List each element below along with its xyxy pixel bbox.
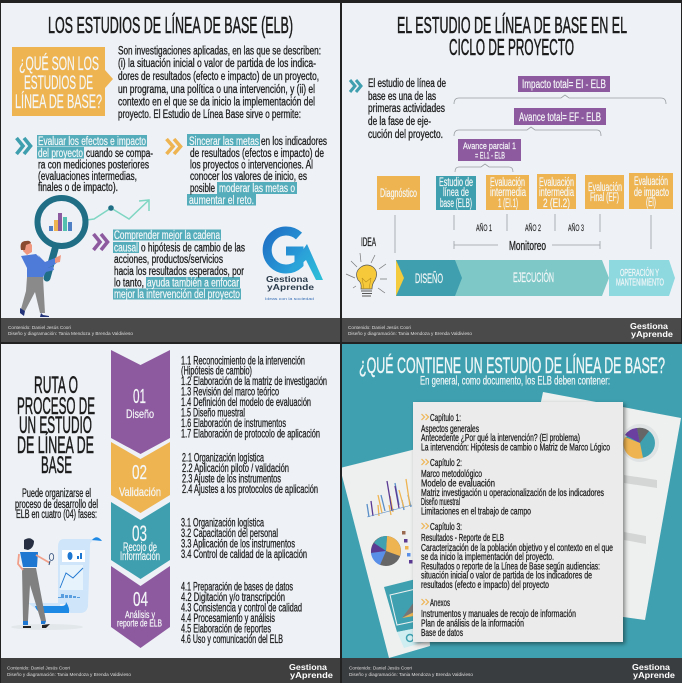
footer: credits: Contenido: Daniel Jesús Coori bbox=[8, 325, 71, 330]
title bbox=[397, 12, 627, 60]
text block: understand causal chain: causal bbox=[114, 242, 138, 254]
list: step 2 tasks: 2.4 Ajustes a los protocolos de aplicación bbox=[182, 482, 318, 496]
text block: evaluate effects: ra con mediciones posteriores bbox=[38, 160, 149, 172]
list: step 3 tasks: 3.3 Aplicación de los instrumentos bbox=[181, 536, 295, 550]
panel: baseline study in the project cycle bbox=[342, 3, 681, 342]
box: diagnosis: Diagnóstico bbox=[380, 188, 417, 200]
box: intermediate evaluation 2: intermedia bbox=[539, 187, 574, 199]
step 3: data collection bbox=[111, 502, 170, 579]
arrow: phases bbox=[396, 260, 675, 296]
text block: evaluate effects bbox=[37, 135, 153, 194]
label: partial progress: = EI.1 - ELB bbox=[475, 150, 505, 162]
section: annexes: Plan de análisis de la información bbox=[421, 618, 524, 630]
box: intermediate evaluation 2: Evaluación bbox=[539, 177, 574, 189]
panel: route of a baseline study bbox=[1, 344, 340, 683]
footer: credits: Contenido: Daniel Jesús Coori bbox=[7, 666, 70, 670]
text block: evaluate effects: del proyecto bbox=[38, 148, 83, 160]
timeline: years and monitoring: AÑO 3 bbox=[568, 223, 584, 234]
section: annexes: Base de datos bbox=[421, 627, 463, 639]
list: step 2 tasks: 2.3 Ajuste de los instrumentos bbox=[182, 472, 281, 486]
footer: credits bbox=[342, 318, 681, 342]
step 1: design: 01 bbox=[133, 386, 146, 408]
icon: purple chevrons bbox=[94, 234, 108, 250]
text block: definition: dores de resultados (efecto e impacto) de un proyecto, bbox=[118, 71, 319, 83]
text block: evaluate effects: (evaluaciones intermedias, bbox=[38, 171, 137, 183]
section: chapter 2: Marco metodológico bbox=[421, 468, 482, 480]
label: total impact bbox=[518, 76, 610, 92]
list: step 4 tasks bbox=[181, 580, 302, 646]
footer: credits: Diseño y diagramación: Tania Mendoza y Brenda Valdivieso bbox=[8, 331, 133, 336]
list: step 3 tasks: 3.1 Organización logística bbox=[181, 516, 264, 530]
text block: set realistic targets: conocer los valores de inicio, es bbox=[190, 171, 307, 183]
label: partial progress: Avance parcial 1 bbox=[463, 141, 516, 152]
list: step 3 tasks bbox=[181, 516, 307, 561]
list: step 1 tasks bbox=[181, 354, 327, 440]
section: chapter 1: Capítulo 1: bbox=[430, 412, 461, 424]
text block: intro: base es una de las bbox=[368, 91, 436, 103]
text block: evaluate effects: cuando se compa- bbox=[86, 148, 153, 160]
text block: set realistic targets: posible bbox=[190, 183, 215, 195]
footer: credits: yAprende bbox=[631, 329, 673, 339]
footer: credits: Gestiona bbox=[632, 662, 670, 672]
step 4: analysis and report: Análisis y bbox=[125, 610, 155, 621]
step 1: design bbox=[111, 350, 170, 454]
list: step 2 tasks: 2.2 Aplicación piloto / validación bbox=[182, 461, 289, 475]
list: step 4 tasks: 4.3 Consistencia y control de calidad bbox=[181, 600, 302, 614]
text block: understand causal chain: ayuda también a enfocar bbox=[147, 278, 239, 290]
section: chapter 2: Capítulo 2: bbox=[430, 457, 462, 469]
list: step 1 tasks: 1.2 Elaboración de la matriz de investigación bbox=[181, 374, 327, 388]
list: step 4 tasks: 4.5 Elaboración de reportes bbox=[181, 622, 271, 636]
footer: credits: Gestiona bbox=[630, 321, 668, 331]
box: final evaluation bbox=[585, 175, 624, 209]
text block: set realistic targets: moderar las metas o bbox=[219, 183, 295, 195]
timeline: years and monitoring: Monitoreo bbox=[509, 239, 546, 253]
arrow: phases: EJECUCIÓN bbox=[513, 269, 554, 285]
callout: question box bbox=[12, 47, 113, 116]
logo: Gestiona y Aprende: yAprende bbox=[267, 282, 314, 292]
section: chapter 3: Capítulo 3: bbox=[430, 521, 462, 533]
text block: evaluate effects: Evaluar los efectos e impacto bbox=[38, 136, 146, 148]
title: DE LÍNEA DE bbox=[17, 432, 94, 459]
label: total progress: Avance total= EF - ELB bbox=[519, 112, 601, 124]
step 2: validation: Validación bbox=[119, 485, 161, 499]
text block: intro: cución del proyecto. bbox=[368, 129, 443, 141]
section: chapter 3: Resultados - Reporte de ELB bbox=[421, 532, 504, 544]
section: annexes: Anexos bbox=[430, 597, 450, 609]
logo: Gestiona y Aprende: Ideas con la sociedad bbox=[265, 297, 314, 301]
text block: definition: contexto en el que se da inicio la implementación del bbox=[118, 96, 315, 108]
box: baseline study: Estudio de bbox=[439, 177, 473, 189]
step 2: validation: 02 bbox=[132, 462, 147, 484]
text block: understand causal chain: mejor la intervención del proyecto bbox=[114, 289, 240, 301]
step 3: data collection: 03 bbox=[132, 521, 147, 546]
footer: credits bbox=[1, 318, 340, 342]
text block: definition: Son investigaciones aplicadas, en las que se describen: bbox=[118, 46, 321, 58]
text block: set realistic targets: los proyectos o intervenciones. Al bbox=[190, 160, 313, 172]
step 4: analysis and report: 04 bbox=[133, 589, 148, 611]
timeline: years and monitoring bbox=[454, 223, 600, 253]
footer: credits: yAprende bbox=[290, 670, 333, 680]
section: annexes: Instrumentos y manuales de recojo de información bbox=[421, 608, 576, 620]
logo: Gestiona y Aprende bbox=[265, 231, 323, 301]
box: final evaluation: Final (EF) bbox=[590, 192, 619, 204]
box: baseline study: línea de bbox=[443, 187, 469, 199]
box: baseline study bbox=[436, 176, 476, 210]
callout: question box: LÍNEA DE BASE? bbox=[15, 92, 102, 113]
text block: understand causal chain: o hipótesis de cambio de las bbox=[141, 242, 245, 254]
text block: intro: ELB en cuatro (04) fases: bbox=[16, 509, 97, 521]
step 1: design: Diseño bbox=[126, 407, 154, 421]
footer: credits bbox=[342, 658, 682, 683]
box: intermediate evaluation 2 bbox=[537, 174, 576, 210]
section: chapter 2: Modelo de evaluación bbox=[421, 478, 495, 490]
section: chapter 2: Diseño muestral bbox=[421, 496, 460, 508]
box: intermediate evaluation 1: 1 (EI.1) bbox=[498, 198, 518, 210]
label: total impact: Impacto total= EI - ELB bbox=[522, 79, 606, 91]
callout: question box: ¿QUÉ SON LOS bbox=[19, 54, 99, 75]
list: step 1 tasks: 1.6 Elaboración de instrumentos bbox=[181, 416, 286, 430]
text block: intro bbox=[15, 488, 98, 521]
list: step 1 tasks: 1.4 Definición del modelo de evaluación bbox=[181, 395, 311, 409]
text block: definition: un programa, una política o una intervención, y (ii) el bbox=[118, 84, 315, 96]
section: chapter 3: resultados (efecto e impacto) del proyecto bbox=[421, 579, 549, 591]
footer: credits: Diseño y diagramación: Tania Mendoza y Brenda Valdivieso bbox=[348, 331, 472, 336]
title: LOS ESTUDIOS DE LÍNEA DE BASE (ELB) bbox=[48, 12, 293, 38]
text block: definition: proyecto. El Estudio de Línea Base sirve o permite: bbox=[118, 109, 301, 121]
list: step 4 tasks: 4.2 Digitación y/o transcripción bbox=[181, 590, 285, 604]
list: step 2 tasks bbox=[182, 450, 318, 496]
box: intermediate evaluation 1 bbox=[486, 175, 529, 210]
text block: understand causal chain: Comprender mejor la cadena bbox=[114, 230, 220, 242]
list: step 4 tasks: 4.1 Preparación de bases de datos bbox=[181, 580, 293, 594]
main document sheet bbox=[413, 402, 623, 642]
text block: understand causal chain: lo tanto, bbox=[114, 278, 144, 290]
title bbox=[17, 372, 95, 479]
text block: evaluate effects: finales o de impacto). bbox=[38, 182, 118, 194]
text block: set realistic targets: Sincerar las metas bbox=[189, 136, 259, 148]
list: step 4 tasks: 4.6 Uso y comunicación del ELB bbox=[181, 632, 283, 646]
text block: set realistic targets: aumentar el reto. bbox=[189, 195, 254, 207]
panel: what are baseline studies bbox=[1, 3, 340, 342]
box: diagnosis bbox=[377, 176, 420, 210]
list: step 1 tasks: (Hipótesis de cambio) bbox=[181, 364, 252, 378]
box: final evaluation: Evaluación bbox=[588, 182, 622, 194]
text block: set realistic targets bbox=[187, 134, 327, 207]
list: step 3 tasks: 3.4 Control de calidad de la aplicación bbox=[181, 547, 307, 561]
arrow: phases: DISEÑO bbox=[415, 270, 443, 286]
icon: person with magnifier and chart bbox=[20, 198, 149, 317]
box: impact evaluation: (EI) bbox=[646, 197, 656, 209]
box: intermediate evaluation 1: Evaluación bbox=[490, 177, 525, 189]
icon: teal chevrons bbox=[16, 138, 30, 154]
timeline: years and monitoring: AÑO 1 bbox=[476, 223, 492, 234]
icon: gold chevrons bbox=[166, 139, 180, 154]
text block: understand causal chain bbox=[113, 230, 245, 301]
text block: definition: (i) la situación inicial o valor de partida de los indica- bbox=[118, 58, 316, 70]
section: chapter 1: Antecedente ¿Por qué la intervención? (El problema) bbox=[421, 432, 580, 444]
timeline: years and monitoring: AÑO 2 bbox=[525, 223, 541, 234]
illustration: left document sheet bbox=[340, 448, 432, 658]
logo: Gestiona y Aprende: Gestiona bbox=[266, 274, 308, 284]
list: step 1 tasks: 1.5 Diseño muestral bbox=[181, 406, 245, 420]
text block: intro: Puede organizarse el bbox=[22, 488, 91, 500]
box: intermediate evaluation 2: 2 (EI.2) bbox=[543, 198, 570, 210]
panel: route of a baseline study: PROCESO DE bbox=[17, 393, 95, 420]
list: step 1 tasks: 1.7 Elaboración de protocolo de aplicación bbox=[181, 426, 320, 440]
text block: intro: El estudio de línea de bbox=[368, 78, 446, 90]
section: chapter 3: situación inicial o valor de partida de los indicadores de bbox=[421, 570, 592, 582]
footer: credits: Diseño y diagramación: Tania Mendoza y Brenda Valdivieso bbox=[7, 672, 131, 677]
footer: credits: Gestiona bbox=[289, 662, 327, 672]
footer: credits bbox=[1, 658, 340, 683]
section: annexes bbox=[421, 597, 576, 639]
text block: intro: proceso de desarrollo del bbox=[15, 499, 98, 511]
text block: intro: primeras actividades bbox=[368, 103, 445, 115]
text block: set realistic targets: en los indicadores bbox=[261, 136, 327, 148]
footer: credits: Contenido: Daniel Jesús Coori bbox=[349, 666, 412, 670]
text block: set realistic targets: de resultados (efectos e impacto) de bbox=[190, 148, 324, 160]
section: chapter 3 bbox=[421, 521, 613, 591]
box: intermediate evaluation 1: intermedia bbox=[490, 187, 526, 199]
list: step 1 tasks: 1.1 Reconocimiento de la intervención bbox=[181, 354, 305, 368]
footer: credits: yAprende bbox=[633, 670, 675, 680]
title: UN ESTUDIO bbox=[19, 412, 92, 439]
label: total progress bbox=[514, 108, 606, 125]
panel: what a baseline study contains bbox=[340, 344, 682, 683]
box: baseline study: base (ELB) bbox=[440, 198, 472, 210]
step 2: validation bbox=[111, 442, 170, 513]
label: partial progress bbox=[458, 139, 521, 162]
title: RUTA O bbox=[34, 372, 78, 399]
list: step 1 tasks: 1.3 Revisión del marco teórico bbox=[181, 384, 279, 398]
title: BASE bbox=[41, 452, 72, 479]
text block: understand causal chain: acciones, productos/servicios bbox=[114, 254, 223, 266]
footer: credits: Contenido: Daniel Jesús Coori bbox=[348, 325, 411, 330]
label: idea: IDEA bbox=[361, 237, 376, 249]
callout: question box: ESTUDIOS DE bbox=[24, 73, 93, 94]
icon: person with report scroll bbox=[11, 537, 102, 630]
text block: understand causal chain: hacia los resultados esperados, por bbox=[114, 266, 244, 278]
text block: intro: de la fase de eje- bbox=[368, 116, 431, 128]
text block: definition bbox=[118, 46, 321, 121]
icon: light bulb bbox=[346, 253, 387, 296]
section: chapter 3: se da inicio la implementación del proyecto. bbox=[421, 551, 554, 563]
list: step 2 tasks: 2.1 Organización logística bbox=[182, 450, 264, 464]
text block: intro bbox=[368, 78, 446, 141]
section: chapter 1 bbox=[421, 412, 610, 454]
step 3: data collection: Información bbox=[120, 551, 160, 563]
step 4: analysis and report bbox=[111, 566, 170, 648]
section: chapter 2 bbox=[421, 457, 604, 518]
section: chapter 1: Aspectos generales bbox=[421, 423, 479, 435]
illustration: right document sheet bbox=[541, 392, 681, 620]
step 4: analysis and report: reporte de ELB bbox=[117, 618, 162, 630]
footer: credits: Diseño y diagramación: Tania Mendoza y Brenda Valdivieso bbox=[349, 672, 473, 677]
list: step 3 tasks: 3.2 Capacitación del personal bbox=[181, 526, 278, 540]
list: step 4 tasks: 4.4 Procesamiento y análisis bbox=[181, 611, 275, 625]
icon: teal chevrons bbox=[350, 80, 361, 92]
section: chapter 2: Limitaciones en el trabajo de campo bbox=[421, 506, 531, 518]
box: impact evaluation bbox=[629, 173, 673, 209]
step 3: data collection: Recojo de bbox=[123, 542, 157, 554]
